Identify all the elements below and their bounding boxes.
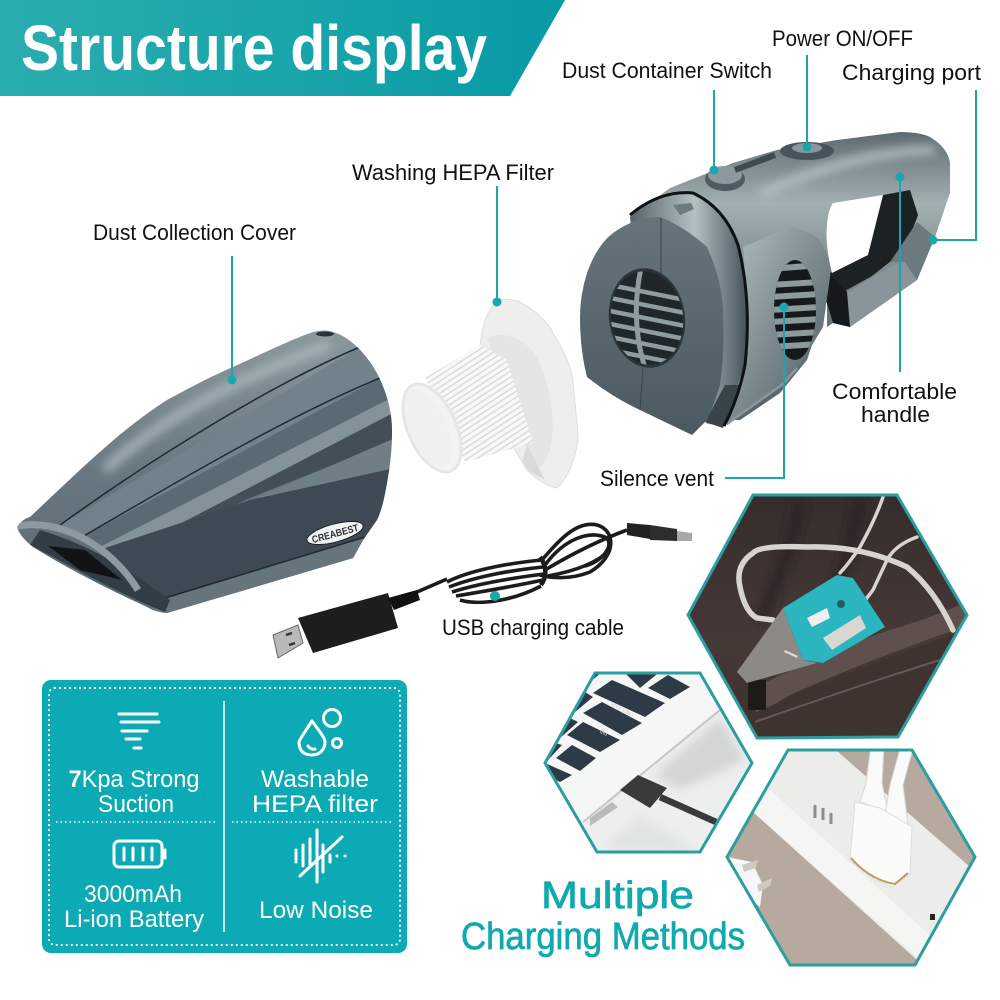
- feature: battery: 3000mAh: [84, 881, 182, 908]
- latch: [673, 203, 694, 215]
- product: washable HEPA filter: [391, 299, 578, 488]
- handle opening: [827, 195, 883, 273]
- charger: [850, 802, 912, 887]
- feature: battery: [64, 841, 204, 933]
- USB dongle: [298, 593, 398, 653]
- feature: suction: 7Kpa Strong: [68, 766, 200, 793]
- USB plug: [620, 775, 667, 808]
- dust container switch button: [705, 167, 745, 191]
- callout: charging port: [842, 60, 981, 244]
- callout: dust collection cover: [93, 220, 296, 384]
- callout: USB charging cable: [442, 591, 624, 640]
- feature: suction: [68, 714, 200, 818]
- feature: battery: Li-ion Battery: [64, 906, 204, 933]
- callout: dust container switch: Dust Container Switch: [562, 58, 772, 83]
- callout: power on/off: [772, 26, 913, 152]
- callout: charging port: Charging port: [842, 60, 981, 85]
- collar: [630, 193, 747, 425]
- feature: low noise: [259, 830, 373, 924]
- feature: washable filter: Washable: [261, 766, 369, 793]
- feature: suction: Suction: [98, 791, 174, 818]
- silence vent: [774, 260, 816, 360]
- front disc: [580, 217, 724, 435]
- white block with prongs: [727, 857, 763, 907]
- grip: [847, 262, 917, 327]
- callout: USB charging cable: USB charging cable: [442, 615, 624, 640]
- callout: dust container switch: [562, 58, 772, 174]
- cables and connectors: [860, 752, 912, 824]
- feature: washable filter: [252, 710, 378, 818]
- callout: power on/off: Power ON/OFF: [772, 26, 913, 51]
- DC plug: [627, 523, 650, 539]
- title: Structure display: [21, 12, 487, 84]
- power button: [780, 142, 834, 160]
- product: motor unit with handle: [580, 132, 950, 435]
- title banner: [0, 0, 565, 96]
- keyboard keys: [540, 670, 690, 782]
- leather seat: [756, 605, 965, 712]
- callout: washing HEPA filter: [352, 160, 554, 306]
- power bank body: [737, 608, 817, 683]
- cable loops: [417, 524, 627, 602]
- heading: multiple charging methods: Multiple: [541, 875, 694, 917]
- callout: silence vent: Silence vent: [600, 466, 714, 491]
- hexagon photo: laptop: [540, 670, 755, 860]
- black inner handle: [830, 190, 918, 298]
- front grill: [602, 263, 692, 373]
- hexagon photo: wall charger: [720, 745, 985, 970]
- brand logo: [305, 517, 365, 549]
- hexagon photo: power bank: [680, 490, 975, 745]
- side plate: [727, 227, 830, 425]
- brand logo: CREABEST: [311, 523, 360, 546]
- callout lines and labels: [93, 26, 981, 640]
- feature: washable filter: HEPA filter: [252, 791, 378, 818]
- callout: silence vent: [600, 302, 788, 491]
- callout: comfortable handle: handle: [861, 402, 930, 427]
- icon: suction funnel: [119, 714, 159, 748]
- icon: water drop and bubbles: [299, 710, 342, 755]
- handle and body shell: [630, 132, 950, 420]
- callout: dust collection cover: Dust Collection Cover: [93, 220, 296, 245]
- icon: muted sound wave: [296, 830, 345, 882]
- callout: washing HEPA filter: Washing HEPA Filter: [352, 160, 554, 185]
- icon: battery: [114, 841, 165, 867]
- product: dust collection cover: [17, 330, 400, 620]
- hexagon photo: laptop: tab: [598, 727, 609, 737]
- callout: comfortable handle: [832, 172, 957, 427]
- hexagon photo: laptop: caps lock: [609, 700, 635, 718]
- callout: comfortable handle: Comfortable: [832, 379, 957, 404]
- power strip: [754, 752, 968, 960]
- product: USB charging cable: [273, 523, 692, 658]
- feature: low noise: Low Noise: [259, 897, 373, 924]
- cables: [739, 497, 953, 630]
- heading: multiple charging methods: Charging Methods: [461, 916, 745, 958]
- heading: multiple charging methods: [461, 875, 745, 958]
- feature panel: [42, 680, 407, 953]
